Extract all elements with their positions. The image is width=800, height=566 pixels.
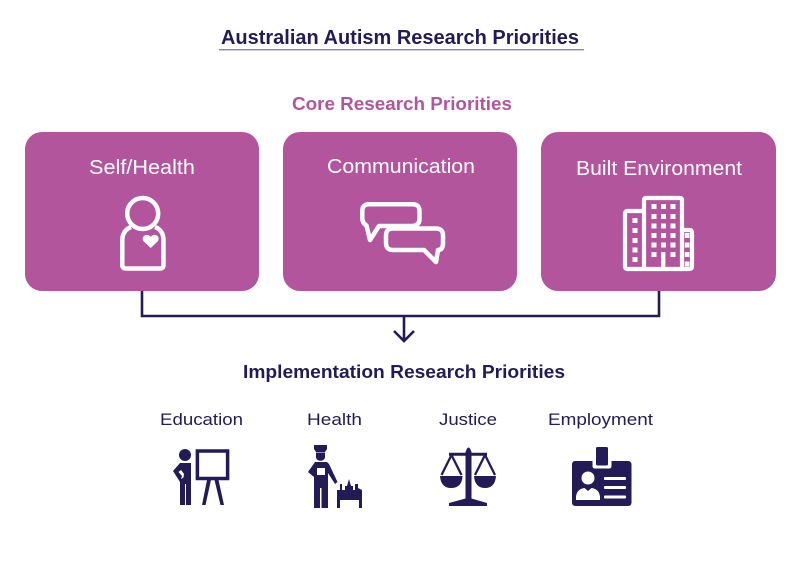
label: employment: Employment bbox=[548, 410, 653, 429]
label: justice: Justice bbox=[439, 410, 497, 429]
heading: implementation research priorities: Implementation Research Priorities bbox=[243, 362, 565, 382]
icon: scales of justice bbox=[440, 448, 496, 506]
label: health: Health bbox=[307, 410, 362, 429]
label: education: Education bbox=[160, 410, 243, 429]
icon: id badge bbox=[572, 447, 632, 506]
label: communication: Communication bbox=[327, 156, 475, 178]
icon: person with heart bbox=[122, 198, 164, 268]
panel: communication bbox=[283, 132, 517, 291]
connector arrow bbox=[142, 290, 659, 341]
panel: built environment bbox=[541, 132, 776, 291]
label: self/health: Self/Health bbox=[89, 157, 195, 179]
icon: nurse with cart bbox=[308, 445, 362, 508]
title: Australian Autism Research Priorities bbox=[221, 27, 579, 49]
heading: core research priorities: Core Research Priorities bbox=[292, 94, 512, 114]
label: built environment: Built Environment bbox=[576, 158, 742, 180]
panel: self/health bbox=[25, 132, 259, 291]
icon: buildings bbox=[625, 198, 692, 269]
icon: speech bubbles bbox=[362, 204, 443, 262]
icon: teacher at board bbox=[173, 449, 228, 505]
